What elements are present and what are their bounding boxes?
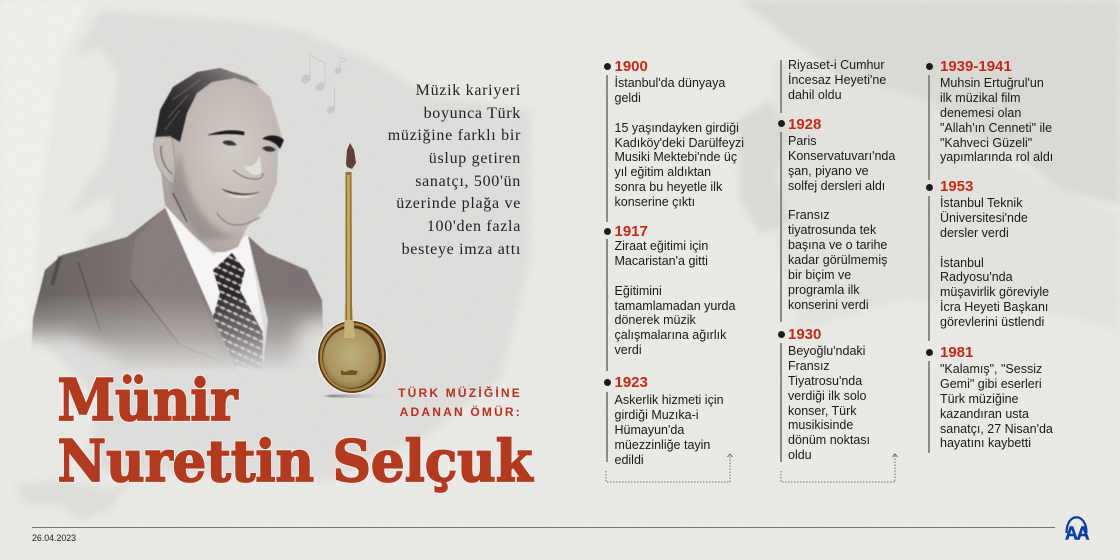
tie (213, 253, 263, 372)
nose and mouth (243, 155, 262, 175)
text: 1900 (614, 58, 648, 74)
text: Ziraat eğitimi için Macaristan'a gitti Eğitimini tamamlamadan yurda dönerek müzik çalışmalarına ağırlık verdi (614, 239, 735, 357)
title: Münir (58, 366, 238, 434)
text: Askerlik hizmeti için girdiği Muzıka-i Hümayun'da müezzinliğe tayin edildi (614, 393, 724, 466)
text: Muhsin Ertuğrul'un ilk müzikal film denemesi olan "Allah'ın Cenneti" ile "Kahveci Güzeli" yapımlarında rol aldı (940, 76, 1053, 164)
text: 1928 (788, 116, 821, 132)
text: Riyaset-i Cumhur İncesaz Heyeti'ne dahil oldu (788, 58, 886, 102)
eyes (222, 140, 237, 146)
text: İstanbul Teknik Üniversitesi'nde dersler verdi İstanbul Radyosu'nda müşavirlik göreviyle İcra Heyeti Başkanı görevlerini üstlendi (940, 196, 1049, 329)
eyebrows (208, 131, 244, 135)
text: 1917 (614, 222, 648, 240)
title: Nurettin Selçuk (58, 427, 534, 495)
entry 1953 (926, 178, 1049, 341)
ear (154, 134, 176, 186)
AA logo: AA (1065, 524, 1089, 544)
footer rule (32, 526, 1055, 528)
title: Nurettin Selçuk (58, 427, 534, 495)
face shading (170, 150, 235, 240)
text: 1953 (940, 178, 973, 194)
timeline column 1 (604, 58, 744, 466)
text: 1981 (940, 344, 973, 360)
entry 1928 (778, 116, 896, 322)
date: 26.04.2023 (32, 533, 76, 543)
entry 1981 (926, 344, 1053, 453)
jacket (32, 208, 323, 367)
text: 1930 (788, 326, 821, 342)
portrait of Münir Nurettin Selçuk (32, 68, 323, 369)
title: Münir (58, 366, 238, 434)
entry 1930 (778, 326, 870, 462)
timeline column 3 (926, 58, 1053, 453)
hair (155, 68, 260, 142)
entry 1939-1941 (926, 58, 1053, 180)
text: 1923 (614, 374, 648, 390)
subtitle: TÜRK MÜZİĞİNE ADANAN ÖMÜR: (398, 386, 522, 419)
neck and head (157, 68, 283, 252)
timeline column 2 (778, 58, 896, 462)
entry 1917 (604, 222, 736, 371)
text: Paris Konservatuvarı'nda şan, piyano ve solfej dersleri aldı Fransız tiyatrosunda tek başına ve o tarihe kadar görülmemiş bir biçim ve programla ilk konserini verdi (788, 134, 895, 312)
text: "Kalamış", "Sessiz Gemi" gibi eserleri Türk müziğine kazandıran usta sanatçı, 27 Nisan'da hayatını kaybetti (940, 362, 1053, 450)
text: 1939-1941 (940, 58, 1012, 74)
entry 1923 (604, 374, 724, 466)
text: İstanbul'da dünyaya geldi 15 yaşındayken girdiği Kadıköy'deki Darülfeyzi Musiki Mektebi'nde üç yıl eğitim aldıktan sonra bu heyetle ilk konserine çıktı (614, 76, 744, 209)
text: Beyoğlu'ndaki Fransız Tiyatrosu'nda verdiği ilk solo konser, Türk musikisinde dönüm noktası oldu (788, 344, 870, 462)
intro text: Müzik kariyeri boyunca Türk müziğine farklı bir üslup getiren sanatçı, 500'ün üzerinde plağa ve 100'den fazla besteye imza attı (388, 82, 521, 258)
shirt (166, 206, 264, 332)
entry 1900 (604, 58, 744, 222)
